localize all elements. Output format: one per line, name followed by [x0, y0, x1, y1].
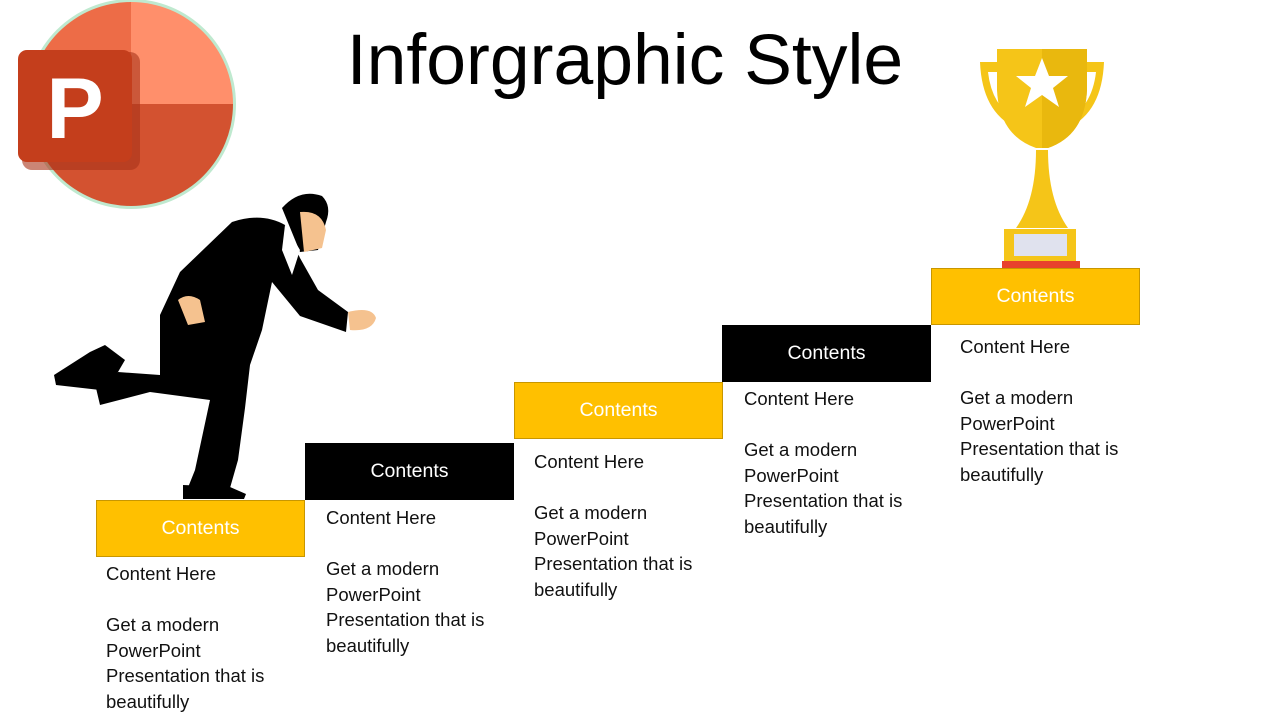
text block 1	[106, 563, 264, 712]
title: Inforgraphic Style	[347, 20, 903, 100]
step 3: Contents	[579, 399, 658, 421]
text block 2: Get a modern PowerPoint Presentation that is beautifully	[326, 558, 484, 656]
text block 2: Content Here	[326, 507, 436, 528]
icon: powerpoint logo	[18, 0, 236, 209]
figure: running businessman	[54, 194, 376, 499]
step 5: Contents	[996, 285, 1075, 307]
text block 5: Get a modern PowerPoint Presentation that is beautifully	[960, 387, 1118, 484]
text block 1: Content Here	[106, 563, 216, 584]
text block 5: Content Here	[960, 336, 1070, 357]
step 4: Contents	[787, 342, 866, 364]
step 2	[305, 443, 514, 500]
text block 4	[744, 388, 902, 537]
icon: powerpoint logo: P	[46, 61, 104, 157]
text block 3: Content Here	[534, 451, 644, 472]
text block 3	[534, 451, 692, 600]
text block 3: Get a modern PowerPoint Presentation that is beautifully	[534, 502, 692, 600]
text block 1: Get a modern PowerPoint Presentation that is beautifully	[106, 614, 264, 712]
step 4	[722, 325, 931, 382]
step 1	[96, 500, 305, 557]
text block 2	[326, 507, 484, 656]
step 2: Contents	[370, 460, 449, 482]
text block 4: Get a modern PowerPoint Presentation that is beautifully	[744, 439, 902, 536]
step 3	[514, 382, 723, 439]
text block 4: Content Here	[744, 388, 854, 409]
step 1: Contents	[161, 517, 240, 539]
icon: trophy	[980, 49, 1104, 268]
step 5	[931, 268, 1140, 325]
text block 5	[960, 336, 1118, 485]
